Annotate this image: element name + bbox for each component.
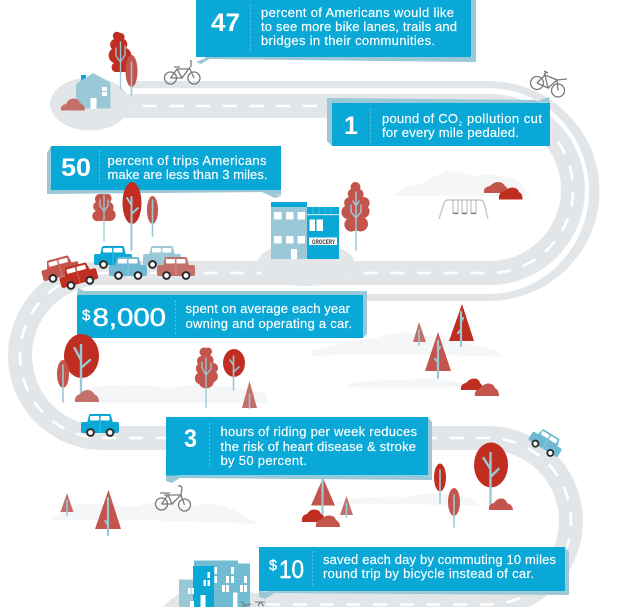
text: percent of trips Americans <box>108 153 267 168</box>
text: pollution cut <box>467 111 542 126</box>
windows <box>188 567 247 607</box>
grocery ground <box>257 242 355 286</box>
text: pound of CO <box>382 111 458 126</box>
panel: 1 pound <box>327 97 550 146</box>
text: round trip by bicycle instead of car. <box>323 566 534 581</box>
building <box>271 202 307 259</box>
road: main winding route <box>20 106 583 607</box>
cars: traffic jam <box>39 246 195 291</box>
panel: $10 <box>259 547 569 599</box>
trees: triangle group right <box>413 304 499 396</box>
city area ground <box>163 585 268 607</box>
trees: lower left triangles <box>60 490 121 535</box>
bushes: top right <box>484 182 523 200</box>
text: owning and operating a car. <box>186 316 352 331</box>
number: $ <box>269 558 277 574</box>
bicycles: parked at city <box>241 601 265 606</box>
text: percent of Americans would like <box>261 5 454 20</box>
car: light blue <box>109 257 147 279</box>
start area: home ground <box>50 78 130 130</box>
trees: lower middle <box>302 478 353 527</box>
tree: tall oval <box>122 182 142 250</box>
house <box>76 73 110 109</box>
panel: 50 percent <box>47 146 281 198</box>
bushes <box>302 509 340 527</box>
hills: pale background <box>52 171 531 524</box>
tree: mid triangle <box>425 332 451 378</box>
text: make are less than 3 miles. <box>108 167 268 182</box>
text <box>220 424 418 468</box>
text: for every mile pedaled. <box>382 125 519 140</box>
tree: narrow oval <box>126 55 138 95</box>
tree: small triangle <box>60 493 74 515</box>
bicycle: road bike top <box>164 60 200 84</box>
panel: 47 percent <box>196 0 476 64</box>
number: 10 <box>279 556 304 584</box>
tree: small triangle <box>340 496 353 517</box>
bush <box>489 498 513 510</box>
tree: triangle <box>311 478 335 516</box>
building: back <box>194 560 250 607</box>
swing set <box>439 200 488 219</box>
tree: narrow oval <box>147 196 158 236</box>
number: 50 <box>61 154 91 182</box>
text <box>186 301 352 331</box>
bike lane: upper loop <box>130 81 600 301</box>
text <box>382 111 542 140</box>
bicycle: cruiser <box>156 486 190 511</box>
text: by 50 percent. <box>220 453 307 468</box>
trees: middle left <box>57 334 99 402</box>
trees: middle center <box>195 347 257 408</box>
car: pink <box>157 257 195 279</box>
tree: large oval <box>474 442 508 507</box>
number: $ <box>82 307 91 324</box>
tree: oval dark <box>434 464 446 503</box>
tree: large oval <box>64 334 99 395</box>
panel: 3 hours <box>166 417 432 483</box>
text <box>108 153 268 182</box>
bush <box>75 390 99 402</box>
number: 8,000 <box>92 304 166 332</box>
panel: $8,000 <box>77 288 367 338</box>
number: 1 <box>344 112 358 140</box>
car: blue <box>94 246 132 268</box>
tree: triangle <box>242 381 257 408</box>
text: spent on average each year <box>186 301 351 316</box>
car: light blue turning <box>527 425 566 460</box>
trees: row above cars <box>92 182 158 250</box>
car: pale blue <box>143 246 181 268</box>
bushes <box>461 378 499 396</box>
tree: blob <box>92 194 116 241</box>
bicycle: road bike right <box>530 71 567 97</box>
grocery store: GROCERY <box>312 239 335 246</box>
tree: oval mid <box>448 488 460 527</box>
car: blue on road <box>81 414 119 436</box>
text: to see more bike lanes, trails and <box>261 19 457 34</box>
text: bridges in their communities. <box>261 33 435 48</box>
tree: large triangle <box>95 490 121 535</box>
building: left <box>179 580 196 607</box>
tree: blob <box>195 347 218 408</box>
tree: small triangle <box>413 322 426 345</box>
number <box>269 556 304 584</box>
text <box>261 5 457 48</box>
tree: oval <box>223 349 245 390</box>
grocery and building <box>271 202 339 259</box>
building: front <box>193 566 214 607</box>
trees: lower right <box>434 442 513 527</box>
text: 2 <box>458 121 462 128</box>
bush <box>61 98 85 110</box>
number: 3 <box>184 425 197 453</box>
text: hours of riding per week reduces <box>220 424 418 439</box>
car: red rear <box>39 253 81 284</box>
text <box>323 552 556 581</box>
tree: small oval <box>57 360 69 402</box>
tree: dark triangle <box>449 304 474 346</box>
text: saved each day by commuting 10 miles <box>323 552 556 567</box>
tree: by grocery <box>341 182 370 250</box>
tree: red blob <box>109 32 132 89</box>
house with tree and bush <box>61 32 137 110</box>
number: 47 <box>211 9 240 37</box>
car: red front <box>57 260 99 291</box>
city buildings <box>179 560 250 607</box>
text: the risk of heart disease & stroke <box>220 439 416 454</box>
